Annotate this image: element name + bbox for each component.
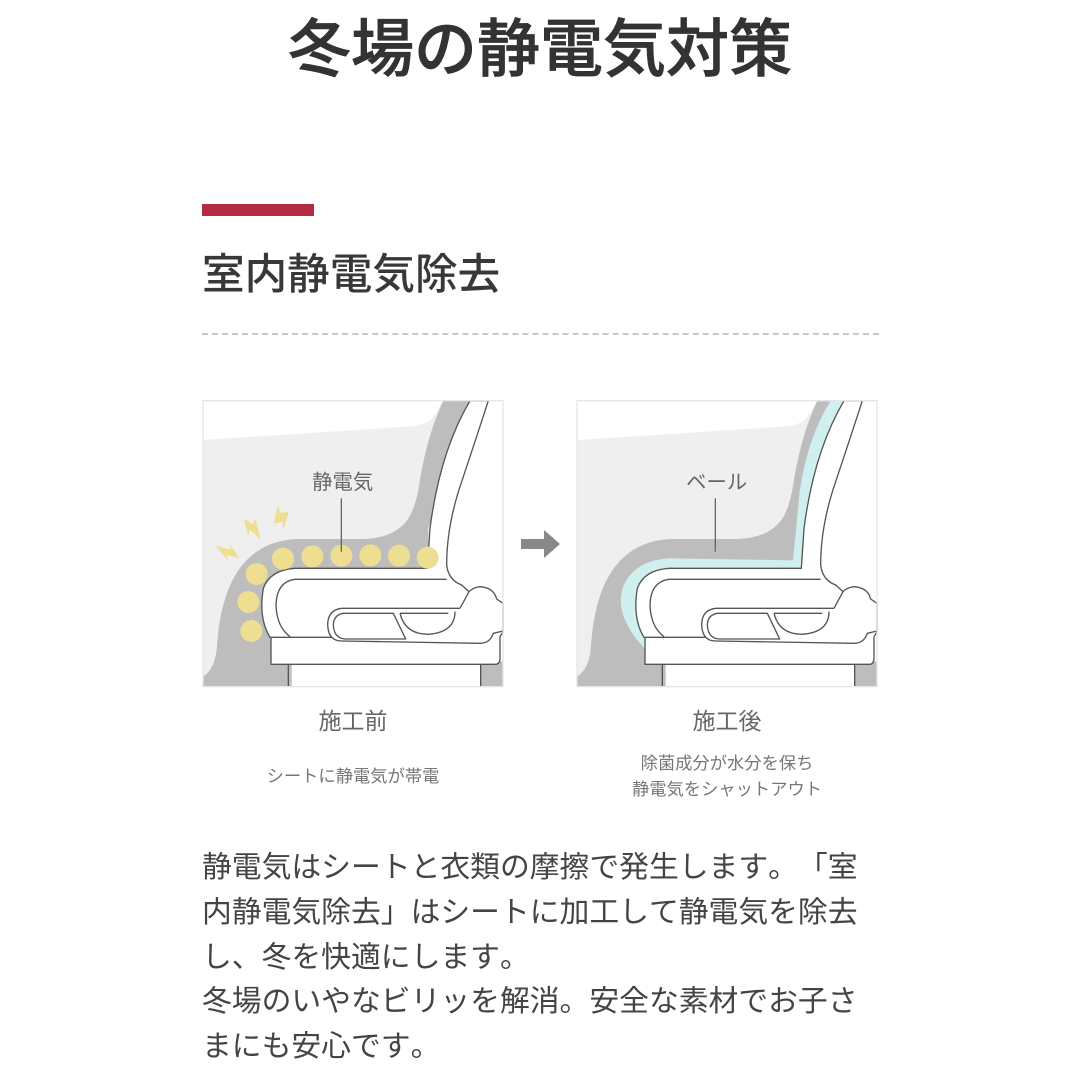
description: after — [632, 753, 822, 799]
leader line — [339, 498, 343, 552]
icon: arrow — [521, 530, 560, 558]
body text — [202, 851, 858, 1063]
title: 冬場の静電気対策 — [288, 15, 792, 85]
body text: 静電気はシートと衣類の摩擦で発生します。「室 — [202, 851, 858, 884]
label: static: 静電気 — [312, 471, 373, 494]
section heading: 室内静電気除去 — [202, 251, 500, 299]
body text: し、冬を快適にします。 — [202, 940, 530, 974]
caption: after: 施工後 — [692, 708, 762, 734]
description: after: 静電気をシャットアウト — [632, 779, 822, 799]
static dots — [237, 544, 439, 642]
illustration: before treatment seat with static — [202, 400, 504, 688]
description: after: 除菌成分が水分を保ち — [641, 753, 813, 773]
body text: まにも安心です。 — [202, 1030, 440, 1063]
body text: 冬場のいやなビリッを解消。安全な素材でお子さ — [202, 985, 858, 1018]
seat outline — [262, 401, 503, 687]
seat outline — [636, 401, 877, 687]
body text: 内静電気除去」はシートに加工して静電気を除去 — [202, 896, 858, 929]
caption: before: 施工前 — [318, 708, 388, 734]
section accent bar — [202, 204, 314, 216]
illustration: after treatment seat with veil — [576, 400, 878, 688]
lightning icons — [216, 506, 289, 561]
description: before: シートに静電気が帯電 — [267, 766, 439, 786]
label: veil: ベール — [686, 472, 747, 494]
leader line — [713, 498, 717, 552]
veil layer — [621, 401, 846, 650]
dashed section divider — [202, 333, 879, 335]
